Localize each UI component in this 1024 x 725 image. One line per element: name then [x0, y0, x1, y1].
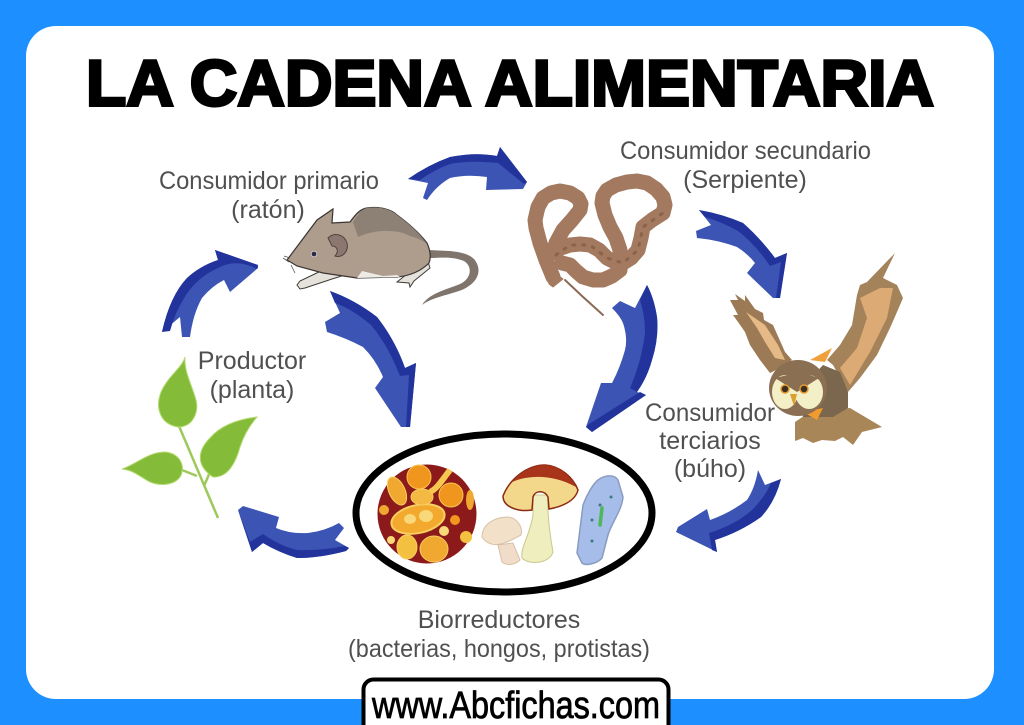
label: tertiary consumer: (búho) [674, 455, 746, 483]
eyes [781, 385, 789, 393]
label: primary consumer: Consumidor primario [159, 167, 379, 195]
right wing [827, 253, 903, 392]
arrow: snake to owl [696, 210, 787, 298]
label: decomposers [348, 606, 650, 663]
whiskers [283, 256, 295, 273]
label: primary consumer [159, 167, 379, 224]
icon: snake [535, 181, 665, 315]
label: producer: Productor [198, 347, 306, 375]
ear [328, 235, 347, 256]
decomposers oval [356, 434, 652, 592]
eye [311, 251, 317, 257]
arrow: mouse to decomposers [325, 291, 416, 427]
body [287, 207, 430, 278]
arrow: plant to mouse [162, 250, 258, 337]
label: secondary consumer: Consumidor secundario [620, 137, 871, 165]
arrow: mouse to snake [408, 147, 527, 200]
icon: small mushroom [482, 517, 521, 564]
tail and feet [795, 408, 882, 445]
beak [790, 394, 797, 406]
body [800, 365, 848, 417]
face discs [772, 375, 798, 409]
icon: plant [122, 357, 257, 518]
label: secondary consumer [620, 137, 871, 194]
label: producer [198, 347, 306, 404]
label: decomposers: (bacterias, hongos, protistas) [348, 635, 650, 663]
leaf: left [122, 452, 182, 484]
tail [422, 250, 479, 305]
hind leg [397, 262, 430, 287]
label: decomposers: Biorreductores [418, 606, 580, 634]
icon: protist [577, 476, 623, 564]
head [769, 360, 827, 416]
icon: bacteria [378, 464, 476, 564]
back spots [556, 213, 663, 263]
arrow: owl to decomposers [676, 470, 781, 552]
icon: owl [730, 253, 903, 445]
front leg [297, 270, 345, 289]
chest orange [803, 408, 823, 420]
body [535, 181, 665, 280]
title: LA CADENA ALIMENTARIA [86, 46, 934, 120]
label: producer: (planta) [210, 376, 294, 404]
shoulder orange [810, 348, 832, 362]
label: tertiary consumer: terciarios [659, 427, 761, 455]
label: tertiary consumer: Consumidor [645, 399, 775, 427]
icon: mouse [283, 207, 479, 305]
head [548, 268, 563, 287]
arrow: snake to decomposers [586, 285, 657, 432]
label: secondary consumer: (Serpiente) [683, 166, 807, 194]
white belly [357, 271, 400, 278]
leaf: top [159, 357, 197, 427]
dark back [353, 207, 427, 244]
left wing [730, 294, 792, 373]
arrow: decomposers to plant [238, 506, 349, 558]
tail [565, 280, 603, 315]
icon: large mushroom [503, 465, 578, 563]
label: primary consumer: (ratón) [231, 196, 305, 224]
label: tertiary consumer [645, 399, 775, 483]
leaf: right [200, 417, 257, 477]
